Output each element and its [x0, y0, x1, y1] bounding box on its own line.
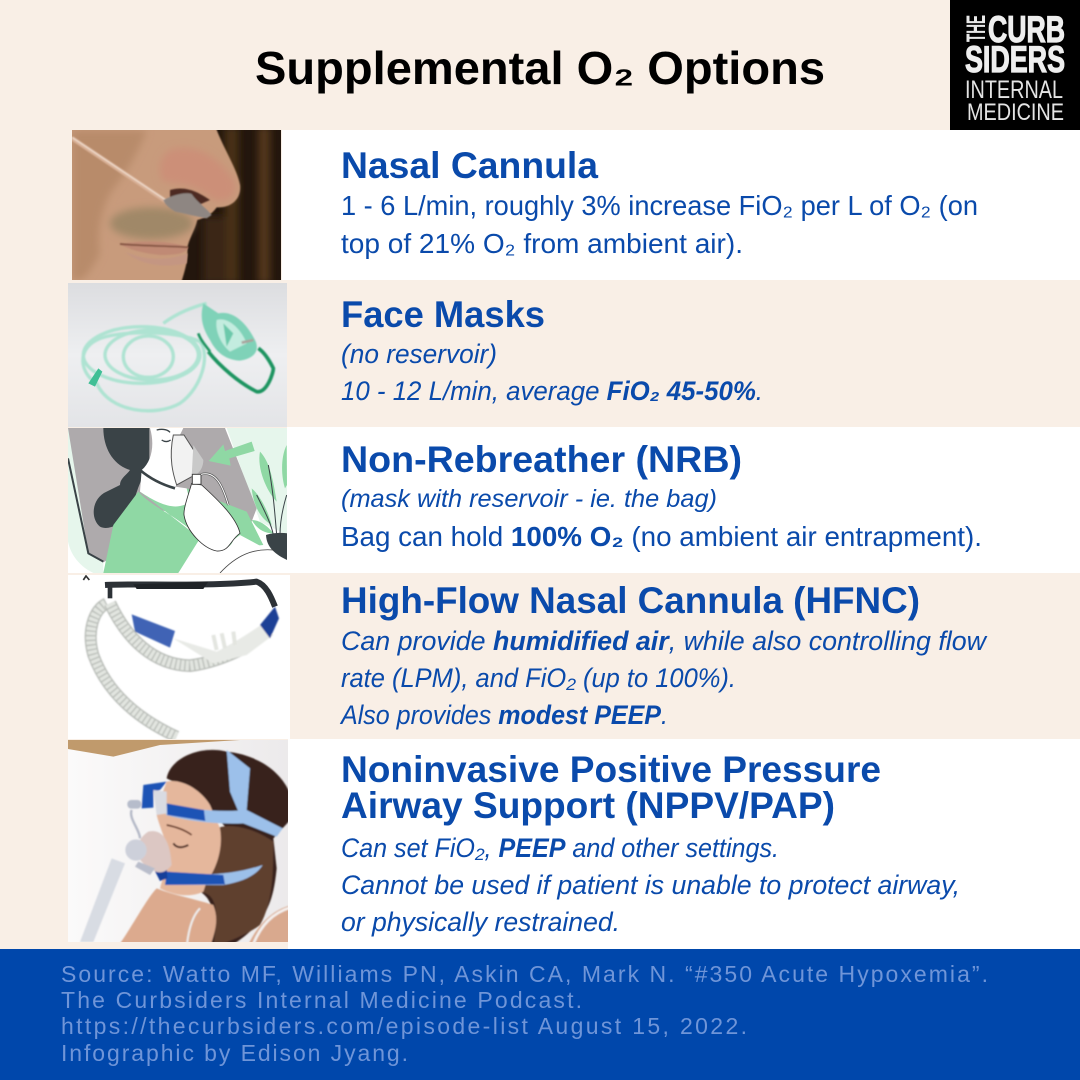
footer: source credit: The Curbsiders Internal Medicine Podcast.: [61, 987, 582, 1013]
heading: Noninvasive Positive Pressure Airway Support: Airway Support (NPPV/PAP): [341, 785, 835, 826]
text: non-rebreather description: Bag can hold 100% O₂ (no ambient air entrapment).: [341, 521, 982, 552]
panel: High-Flow Nasal Cannula: [339, 580, 987, 730]
photo: high-flow nasal cannula device: [68, 575, 290, 739]
text: HFNC description: Also provides modest PEEP.: [339, 700, 668, 730]
title: Supplemental O₂ Options: [255, 42, 825, 94]
heading: Non-Rebreather (NRB): Non-Rebreather (NRB): [341, 439, 742, 480]
text: nasal cannula description: [341, 190, 978, 259]
panel: Noninvasive Positive Pressure: [341, 749, 960, 937]
text: non-rebreather description: [341, 485, 982, 552]
text: HFNC description: Can provide humidified air, while also controlling flow: [341, 626, 987, 656]
illustration: woman with non-rebreather mask: [68, 428, 287, 573]
text: nasal cannula description: 1 - 6 L/min, roughly 3% increase FiO₂ per L of O₂ (on: [341, 190, 978, 221]
panel: Face Masks: [341, 294, 763, 406]
text: NPPV description: or physically restrained.: [341, 907, 620, 937]
heading: Face Masks: Face Masks: [341, 294, 545, 335]
footer: source credit: https://thecurbsiders.com/episode-list August 15, 2022.: [61, 1013, 747, 1039]
panel: Non-Rebreather: [341, 439, 982, 552]
text: face masks description: 10 - 12 L/min, average FiO₂ 45-50%.: [341, 376, 763, 406]
text: face masks description: (no reservoir): [341, 339, 497, 369]
heading: High-Flow Nasal Cannula (HFNC): High-Flow Nasal Cannula (HFNC): [341, 580, 920, 621]
text: non-rebreather description: (mask with reservoir - ie. the bag): [341, 485, 717, 513]
text: face masks description: [341, 339, 763, 406]
text: NPPV description: Can set FiO₂, PEEP and other settings.: [341, 833, 779, 863]
heading: Noninvasive Positive Pressure Airway Support: Noninvasive Positive Pressure: [341, 749, 881, 790]
photo: woman wearing PAP mask: [68, 740, 293, 948]
footer: source credit: Infographic by Edison Jyang.: [61, 1040, 408, 1066]
text: NPPV description: [341, 833, 960, 937]
row backgrounds: [282, 130, 1080, 949]
heading: Nasal Cannula: Nasal Cannula: [341, 145, 598, 186]
footer: source credit: [0, 949, 1080, 1080]
photo: nasal cannula on a man's nose: [72, 130, 281, 280]
footer: source credit: Source: Watto MF, Williams PN, Askin CA, Mark N. “#350 Acute Hypoxemia”.: [61, 961, 988, 987]
text: HFNC description: rate (LPM), and FiO₂ (up to 100%).: [341, 663, 736, 693]
text: HFNC description: [339, 626, 987, 730]
photo: oxygen face mask with tubing: [68, 283, 287, 427]
logo: The Curbsiders Internal Medicine: [950, 0, 1080, 130]
heading: Noninvasive Positive Pressure Airway Support: [341, 749, 881, 826]
text: NPPV description: Cannot be used if patient is unable to protect airway,: [341, 870, 960, 900]
panel: Nasal Cannula: [341, 145, 978, 259]
text: nasal cannula description: top of 21% O₂ from ambient air).: [341, 228, 743, 259]
